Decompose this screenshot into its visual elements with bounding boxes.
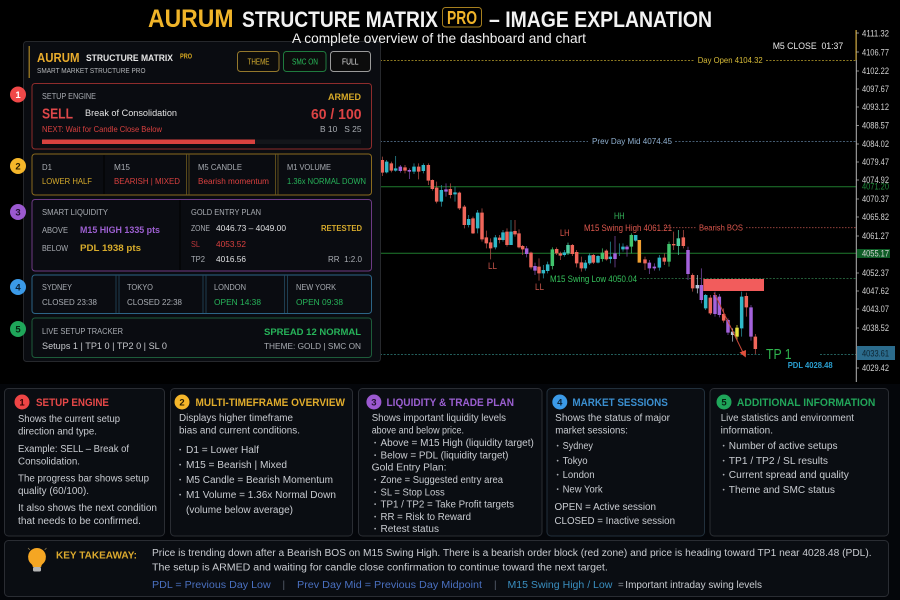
explain: market sessions: Shows the status of major bbox=[555, 413, 671, 424]
legend: = bbox=[618, 580, 624, 591]
panel: liquidity and entry plan: M15 HIGH 1335 pts bbox=[80, 225, 160, 235]
price axis: 4065.82 bbox=[862, 212, 889, 222]
price axis: 4033.61 bbox=[862, 348, 889, 358]
panel: sessions: TOKYO bbox=[127, 282, 153, 292]
price axis: 4043.07 bbox=[862, 304, 889, 314]
explain: liquidity and trade plan: Retest status bbox=[380, 524, 439, 535]
explain: multi-timeframe: • bbox=[179, 492, 182, 499]
price axis: 4071.20 bbox=[862, 182, 889, 192]
explain: market sessions: MARKET SESSIONS bbox=[572, 397, 668, 409]
explain: multi-timeframe: bias and current conditions. bbox=[179, 426, 300, 436]
panel: multi-timeframe: D1 bbox=[42, 162, 52, 172]
explain: setup engine: Shows the current setup bbox=[18, 414, 121, 425]
price axis: 4084.02 bbox=[862, 139, 889, 149]
panel: liquidity and entry plan: RETESTED bbox=[321, 223, 362, 233]
panel: liquidity and entry plan: GOLD ENTRY PLAN bbox=[191, 207, 261, 217]
title: – IMAGE EXPLANATION bbox=[489, 7, 712, 32]
explain: additional information: • bbox=[722, 443, 726, 450]
dashboard panel bbox=[24, 30, 586, 362]
countdown: M5 CLOSE 01:37 bbox=[773, 41, 843, 51]
panel: liquidity and entry plan: SL bbox=[191, 239, 200, 249]
panel: sessions: OPEN 09:38 bbox=[296, 297, 343, 307]
explain: setup engine: It also shows the next condition bbox=[18, 503, 157, 514]
progress bar bbox=[42, 140, 361, 144]
explain: multi-timeframe: MULTI-TIMEFRAME OVERVIEW bbox=[196, 397, 346, 409]
panel: multi-timeframe: M5 CANDLE bbox=[198, 162, 242, 172]
level: previous day mid: Prev Day Mid 4074.45 bbox=[592, 136, 672, 146]
title: PRO bbox=[447, 8, 477, 28]
arrow to TP bbox=[714, 293, 746, 358]
explain: market sessions: market sessions: bbox=[555, 426, 628, 436]
explain: multi-timeframe bbox=[170, 388, 352, 536]
marker 1: 1 bbox=[15, 90, 21, 101]
explain: liquidity and trade plan: Above = M15 High (liquidity target) bbox=[380, 438, 534, 449]
explain: additional information: 5 bbox=[721, 398, 727, 408]
explain: setup engine bbox=[4, 388, 164, 536]
panel: live tracker: SPREAD 12 NORMAL bbox=[264, 327, 361, 338]
explain: liquidity and trade plan: • bbox=[374, 514, 377, 521]
panel: liquidity and entry plan: 4053.52 bbox=[216, 239, 246, 249]
candles right bbox=[645, 230, 755, 354]
explain: market sessions: Sydney bbox=[563, 441, 593, 452]
explain: setup engine: direction and type. bbox=[18, 426, 97, 438]
explain: multi-timeframe: • bbox=[179, 462, 182, 469]
explain: additional information: Number of active setups bbox=[729, 441, 838, 452]
takeaway text: Price is trending down after a Bearish BOS on M15 Swing High. There is a bearish order block (red zone) and price is heading toward TP1 near 4028.48 (PDL). bbox=[152, 548, 872, 559]
panel: liquidity and entry plan: RR 1:2.0 bbox=[328, 254, 362, 264]
explain: additional information: • bbox=[722, 472, 726, 479]
explain: liquidity and trade plan: • bbox=[374, 490, 377, 496]
structure labels: HH bbox=[614, 211, 624, 221]
marker 4 bbox=[10, 279, 26, 295]
price axis: 4074.92 bbox=[862, 175, 889, 185]
panel: setup engine: NEXT: Wait for Candle Close Below bbox=[42, 124, 163, 134]
explain: market sessions: OPEN = Active session bbox=[554, 502, 656, 513]
explain: liquidity and trade plan: Below = PDL (liquidity target) bbox=[380, 450, 508, 462]
structure labels: LL bbox=[535, 282, 544, 292]
panel: setup engine: B 10 S 25 bbox=[320, 124, 362, 134]
explain: liquidity and trade plan: above and below price. bbox=[372, 426, 464, 436]
button: full bbox=[330, 52, 370, 72]
button: smc on bbox=[284, 52, 326, 72]
price axis: 4055.17 bbox=[862, 248, 889, 258]
panel: live tracker: Setups 1 | TP1 0 | TP2 0 | SL 0 bbox=[42, 341, 167, 351]
panel: setup engine: Break of Consolidation bbox=[85, 108, 177, 119]
dashboard header: SMART MARKET STRUCTURE PRO bbox=[37, 66, 146, 75]
explain: multi-timeframe: Displays higher timeframe bbox=[179, 413, 294, 424]
button: full: FULL bbox=[342, 58, 359, 66]
price axis: 4029.42 bbox=[862, 363, 889, 373]
panel: multi-timeframe: M1 VOLUME bbox=[287, 162, 331, 172]
structure labels: LL bbox=[488, 261, 497, 271]
order block bbox=[703, 279, 764, 291]
price axis: 4047.62 bbox=[862, 286, 889, 296]
explain: multi-timeframe: M15 = Bearish | Mixed bbox=[186, 460, 287, 471]
panel: sessions: CLOSED 22:38 bbox=[127, 297, 182, 307]
panel: sessions: NEW YORK bbox=[296, 282, 336, 292]
level: TP line bbox=[380, 353, 856, 355]
explain: liquidity and trade plan: • bbox=[374, 477, 377, 484]
heading: KEY TAKEAWAY: bbox=[56, 550, 137, 562]
takeaway text bbox=[152, 548, 872, 574]
explain: liquidity and trade plan: • bbox=[374, 440, 377, 447]
price axis: 4038.52 bbox=[862, 323, 889, 333]
explain: multi-timeframe: • bbox=[179, 477, 182, 484]
title bbox=[148, 5, 712, 33]
panel: multi-timeframe: BEARISH | MIXED bbox=[114, 176, 180, 186]
dashboard header: STRUCTURE MATRIX bbox=[86, 53, 174, 64]
explain: additional information: ADDITIONAL INFORMATION bbox=[737, 397, 875, 409]
PDL label: PDL 4028.48 bbox=[788, 360, 833, 370]
explain: market sessions: • bbox=[556, 472, 560, 479]
button: smc on: SMC ON bbox=[292, 58, 318, 66]
legend: | bbox=[282, 580, 285, 591]
panel: liquidity and entry plan: ABOVE bbox=[42, 225, 68, 235]
explain: liquidity and trade plan: TP1 / TP2 = Take Profit targets bbox=[380, 500, 514, 510]
explain: multi-timeframe: (volume below average) bbox=[186, 505, 293, 516]
explain: setup engine: The progress bar shows setup bbox=[18, 474, 150, 484]
price axis bbox=[856, 28, 895, 382]
price axis: 4097.67 bbox=[862, 84, 889, 94]
explain: multi-timeframe: M5 Candle = Bearish Momentum bbox=[186, 475, 333, 486]
explain: additional information: • bbox=[722, 458, 726, 465]
explain: multi-timeframe: 2 bbox=[179, 398, 185, 408]
explain: liquidity and trade plan: Shows important liquidity levels bbox=[372, 413, 506, 424]
price axis: 4102.22 bbox=[862, 66, 889, 76]
explain: market sessions: Tokyo bbox=[563, 456, 588, 467]
explain: additional information: Live statistics and environment bbox=[721, 413, 854, 424]
panel: setup engine: SETUP ENGINE bbox=[42, 91, 96, 101]
legend bbox=[152, 580, 762, 591]
marker 3: 3 bbox=[15, 208, 21, 218]
panel: liquidity and entry plan: PDL 1938 pts bbox=[80, 243, 141, 253]
panel: sessions: SYDNEY bbox=[42, 282, 72, 292]
explain: multi-timeframe: D1 = Lower Half bbox=[186, 445, 259, 456]
marker 5: 5 bbox=[15, 324, 21, 336]
marker 2: 2 bbox=[15, 162, 21, 172]
explain: additional information: TP1 / TP2 / SL results bbox=[729, 456, 828, 467]
legend: PDL = Previous Day Low bbox=[152, 580, 272, 591]
level: green support lines bbox=[380, 187, 856, 253]
explain: additional information: • bbox=[722, 487, 726, 494]
explain: setup engine: Consolidation. bbox=[18, 456, 80, 468]
title: STRUCTURE MATRIX bbox=[242, 7, 438, 32]
explain: setup engine: Example: SELL – Break of bbox=[18, 444, 129, 455]
explain: liquidity and trade plan: RR = Risk to Reward bbox=[380, 512, 471, 523]
panel: setup engine bbox=[32, 84, 372, 149]
explain: additional information: information. bbox=[721, 426, 773, 436]
price axis: 4093.12 bbox=[862, 102, 889, 112]
takeaway text: The setup is ARMED and waiting for candle close confirmation to continue toward the next target. bbox=[152, 562, 608, 574]
panel: liquidity and entry plan: TP2 bbox=[191, 254, 205, 264]
explain: liquidity and trade plan bbox=[358, 388, 542, 536]
panel: sessions: OPEN 14:38 bbox=[214, 297, 261, 307]
marker 2 bbox=[10, 158, 26, 174]
panel: liquidity and entry plan bbox=[32, 200, 372, 271]
explain: liquidity and trade plan: Gold Entry Plan: bbox=[372, 462, 446, 474]
panel: liquidity and entry plan: ZONE bbox=[191, 223, 210, 233]
explain: setup engine: quality (60/100). bbox=[18, 486, 89, 497]
panel: liquidity and entry plan: 4016.56 bbox=[216, 254, 246, 264]
panel: liquidity and entry plan: SMART LIQUIDITY bbox=[42, 207, 108, 217]
explain: market sessions: • bbox=[556, 486, 560, 494]
chart bbox=[380, 28, 895, 382]
panel: multi-timeframe: M15 bbox=[114, 162, 130, 172]
panel: setup engine: 60 / 100 bbox=[311, 106, 362, 123]
panel: multi-timeframe: 1.36x NORMAL DOWN bbox=[287, 176, 366, 186]
candles left bbox=[382, 156, 639, 281]
explain: setup engine: that needs to be confirmed. bbox=[18, 516, 141, 527]
structure labels bbox=[488, 211, 672, 292]
legend: Prev Day Mid = Previous Day Midpoint bbox=[297, 580, 482, 591]
price axis: 4079.47 bbox=[862, 157, 889, 167]
legend: | bbox=[494, 580, 497, 591]
button: theme bbox=[238, 52, 279, 72]
price axis: 4070.37 bbox=[862, 194, 889, 204]
panel: liquidity and entry plan: BELOW bbox=[42, 243, 69, 253]
legend: Important intraday swing levels bbox=[625, 580, 762, 591]
explain: market sessions: New York bbox=[563, 484, 603, 496]
panel: multi-timeframe: LOWER HALF bbox=[42, 176, 92, 186]
explain: liquidity and trade plan: SL = Stop Loss bbox=[380, 488, 445, 498]
price axis: 4111.32 bbox=[862, 28, 889, 38]
key takeaway panel bbox=[4, 540, 888, 596]
marker 1 bbox=[10, 86, 26, 102]
price axis: 4106.77 bbox=[862, 48, 889, 58]
panel: sessions bbox=[32, 275, 372, 314]
explain: market sessions: • bbox=[556, 443, 560, 450]
marker 4: 4 bbox=[15, 282, 21, 294]
explain: setup engine: 1 bbox=[19, 398, 25, 408]
panel: live tracker: LIVE SETUP TRACKER bbox=[42, 326, 123, 336]
explain: market sessions: • bbox=[556, 458, 560, 465]
explain: additional information: Current spread and quality bbox=[729, 470, 849, 481]
explain: liquidity and trade plan: • bbox=[374, 452, 377, 460]
explain: market sessions: CLOSED = Inactive session bbox=[554, 516, 675, 527]
level: bearish BOS: Bearish BOS bbox=[699, 222, 743, 232]
dashboard header: AURUM bbox=[37, 50, 80, 65]
explain: liquidity and trade plan: LIQUIDITY & TRADE PLAN bbox=[386, 397, 514, 409]
panel: liquidity and entry plan: 4046.73 – 4049.00 bbox=[216, 223, 286, 233]
dashboard header: PRO bbox=[180, 54, 192, 60]
panel: sessions: CLOSED 23:38 bbox=[42, 297, 97, 307]
explain: market sessions: London bbox=[563, 470, 595, 481]
marker 5 bbox=[10, 321, 26, 337]
explain: market sessions: 4 bbox=[557, 398, 563, 408]
structure labels: LH bbox=[560, 228, 570, 238]
panel: setup engine: SELL bbox=[42, 106, 73, 122]
panel: multi-timeframe bbox=[32, 154, 372, 195]
panel: setup engine: ARMED bbox=[328, 92, 361, 103]
subtitle: A complete overview of the dashboard and chart bbox=[292, 30, 586, 46]
panel: live tracker: THEME: GOLD | SMC ON bbox=[264, 341, 361, 351]
dashboard header bbox=[28, 46, 192, 78]
panel: multi-timeframe: Bearish momentum bbox=[198, 176, 269, 186]
title: AURUM bbox=[148, 5, 234, 33]
marker 3 bbox=[10, 204, 26, 220]
explain: market sessions bbox=[547, 388, 704, 536]
explain: multi-timeframe: M1 Volume = 1.36x Normal Down bbox=[186, 490, 336, 501]
explain: liquidity and trade plan: Zone = Suggested entry area bbox=[380, 475, 504, 486]
panel: sessions: LONDON bbox=[214, 282, 246, 292]
level: swing low line bbox=[640, 277, 856, 279]
legend: M15 Swing High / Low bbox=[508, 580, 613, 591]
explain: liquidity and trade plan: 3 bbox=[371, 398, 377, 408]
explain: liquidity and trade plan: • bbox=[374, 526, 377, 533]
price axis: 4052.37 bbox=[862, 268, 889, 278]
panel: live tracker bbox=[32, 318, 372, 358]
icon: light bulb bbox=[28, 548, 46, 572]
explain: setup engine: SETUP ENGINE bbox=[36, 397, 109, 409]
structure labels: M15 Swing High 4061.21 bbox=[584, 223, 672, 233]
price axis: 4088.57 bbox=[862, 120, 889, 130]
explain: multi-timeframe: • bbox=[179, 447, 182, 454]
explain: liquidity and trade plan: • bbox=[374, 502, 377, 508]
structure labels: M15 Swing Low 4050.04 bbox=[550, 274, 637, 284]
level: day open: Day Open 4104.32 bbox=[698, 55, 763, 65]
TP 1 label: TP 1 bbox=[766, 346, 792, 363]
button: theme: THEME bbox=[248, 58, 270, 66]
price axis: 4061.27 bbox=[862, 231, 889, 241]
explain: additional information bbox=[710, 388, 888, 536]
explain: additional information: Theme and SMC status bbox=[729, 485, 835, 496]
